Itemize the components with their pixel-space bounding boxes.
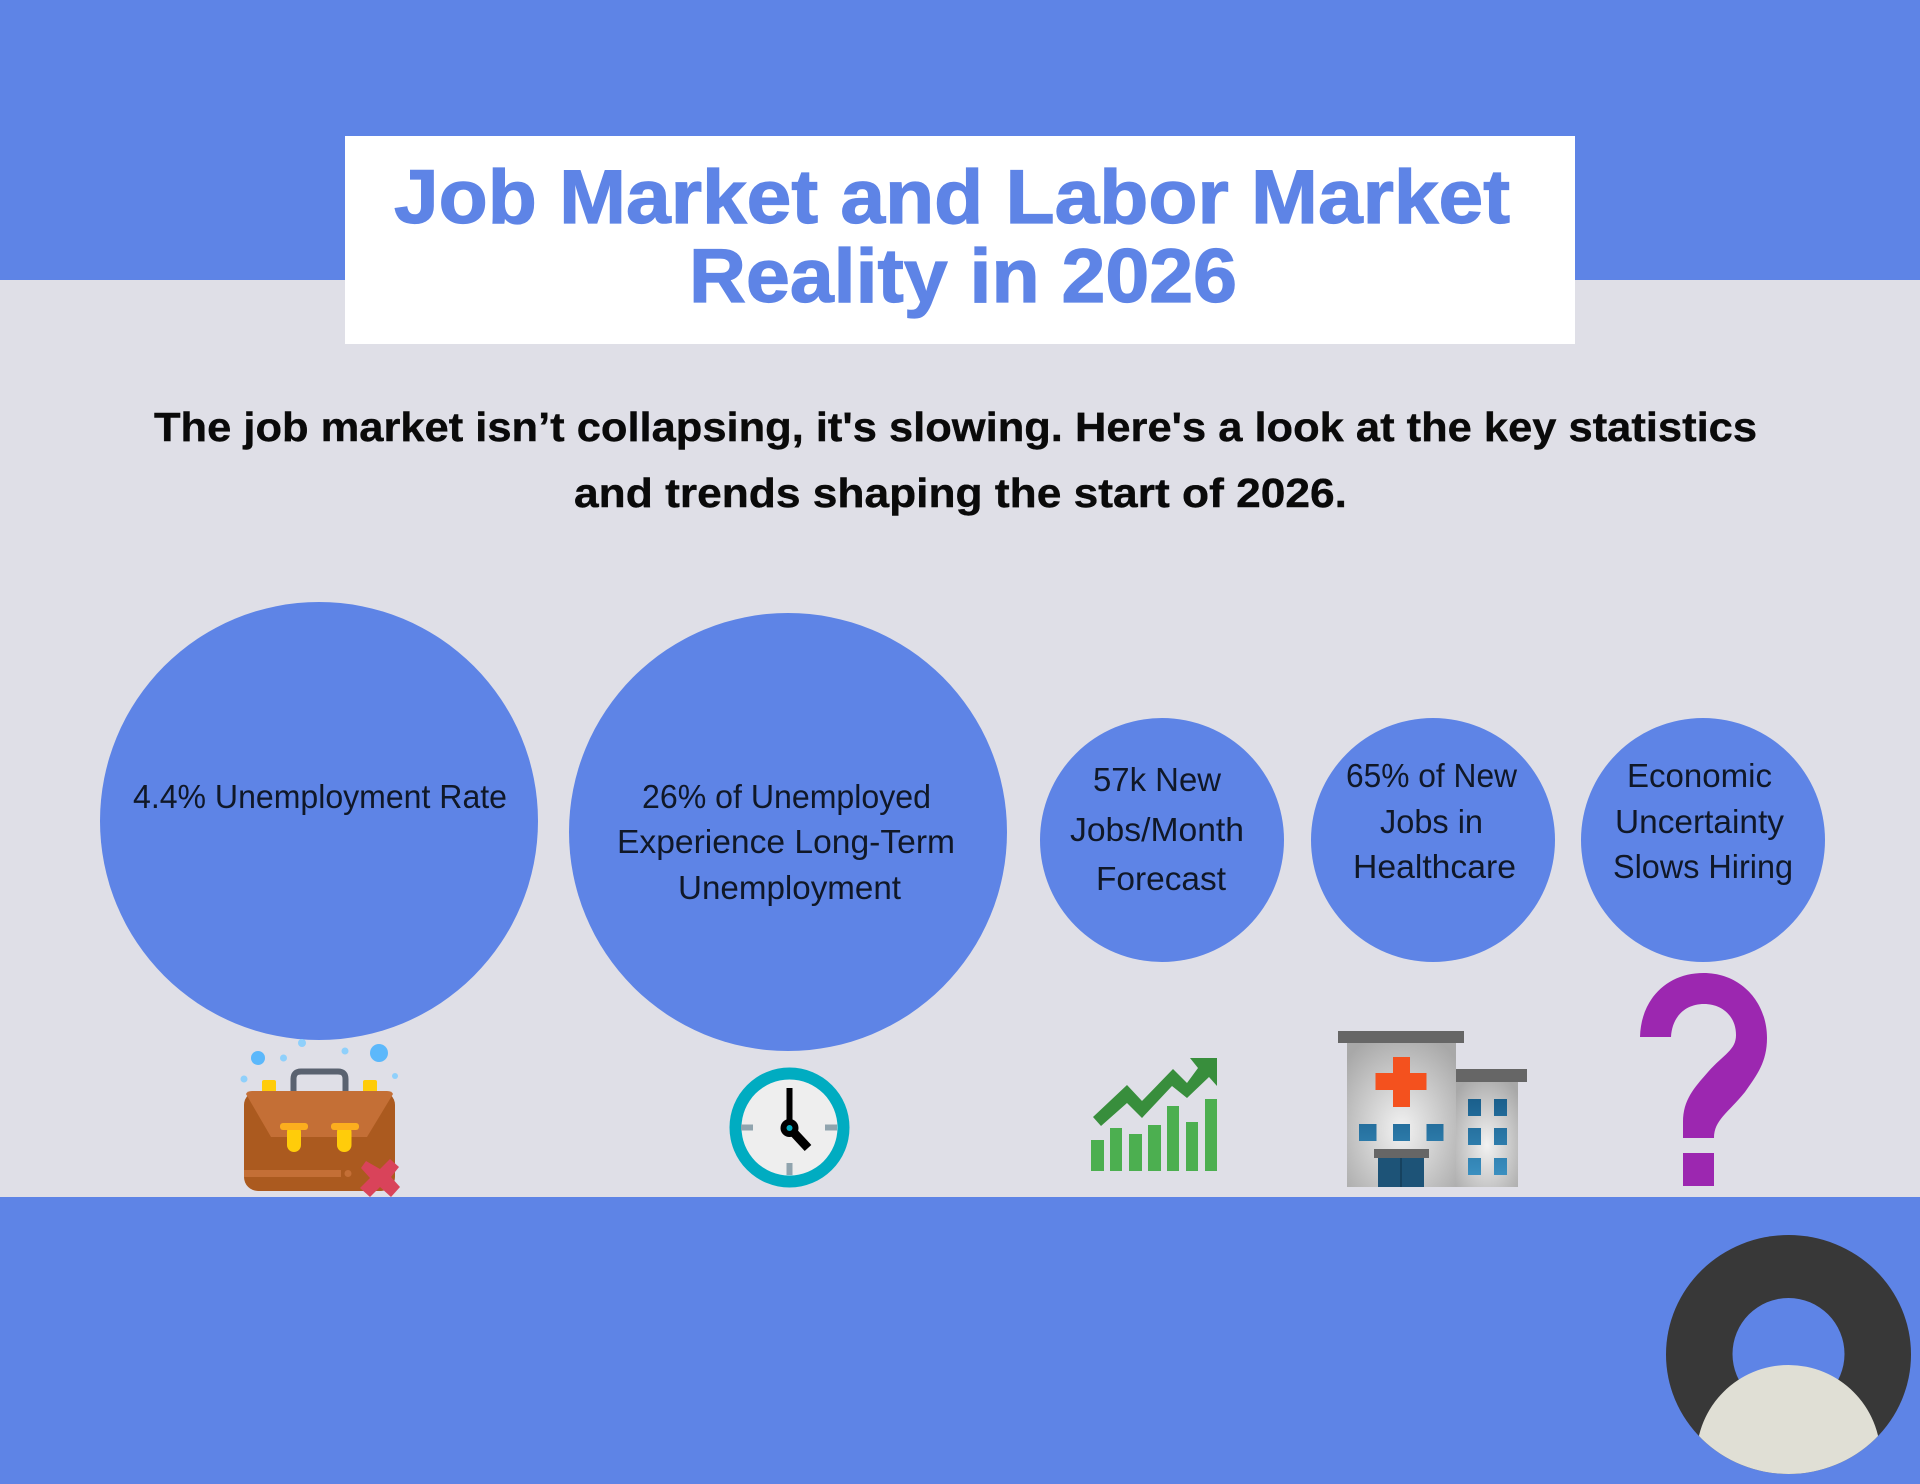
stat circle: healthcare jobs: Jobs in bbox=[1380, 803, 1483, 840]
stat circle: new jobs forecast: 57k New bbox=[1093, 761, 1221, 798]
stat circle: long-term unemployment: Experience Long-Term bbox=[617, 823, 955, 860]
stat circle: long-term unemployment: Unemployment bbox=[678, 869, 901, 906]
stat circle: economic uncertainty bbox=[1581, 718, 1825, 962]
subtitle text bbox=[154, 404, 1757, 516]
icon: rising chart bbox=[1091, 1058, 1217, 1171]
bottom blue band bbox=[0, 1197, 1920, 1484]
stat circle: healthcare jobs bbox=[1311, 718, 1555, 962]
subtitle text: The job market isn’t collapsing, it's slowing. Here's a look at the key statistics bbox=[154, 404, 1757, 450]
avatar badge bbox=[1666, 1235, 1911, 1484]
title bbox=[345, 136, 1575, 344]
stat circle: unemployment rate: 4.4% Unemployment Rate bbox=[133, 778, 507, 815]
stat circle: economic uncertainty: Slows Hiring bbox=[1613, 848, 1793, 885]
stat circle: unemployment rate bbox=[100, 602, 538, 1040]
title: Job Market and Labor Market bbox=[394, 155, 1510, 240]
icon: clock bbox=[730, 1068, 850, 1188]
stat circle: long-term unemployment bbox=[569, 613, 1007, 1051]
stat circle: long-term unemployment: 26% of Unemployed bbox=[642, 778, 931, 815]
stat circle: healthcare jobs: 65% of New bbox=[1346, 757, 1517, 794]
subtitle text: and trends shaping the start of 2026. bbox=[574, 470, 1347, 516]
top blue band bbox=[0, 0, 1920, 280]
icon: briefcase with x bbox=[240, 1039, 400, 1197]
stat circle: economic uncertainty: Economic bbox=[1627, 757, 1772, 794]
stat circle: economic uncertainty: Uncertainty bbox=[1615, 803, 1785, 840]
stat circle: new jobs forecast bbox=[1040, 718, 1284, 962]
stat circle: new jobs forecast: Jobs/Month bbox=[1070, 811, 1244, 848]
icon: question mark bbox=[1640, 973, 1767, 1186]
title: Reality in 2026 bbox=[689, 234, 1237, 319]
stat circle: new jobs forecast: Forecast bbox=[1096, 860, 1226, 897]
stat circle: healthcare jobs: Healthcare bbox=[1353, 848, 1516, 885]
icon: hospital bbox=[1338, 1031, 1527, 1187]
